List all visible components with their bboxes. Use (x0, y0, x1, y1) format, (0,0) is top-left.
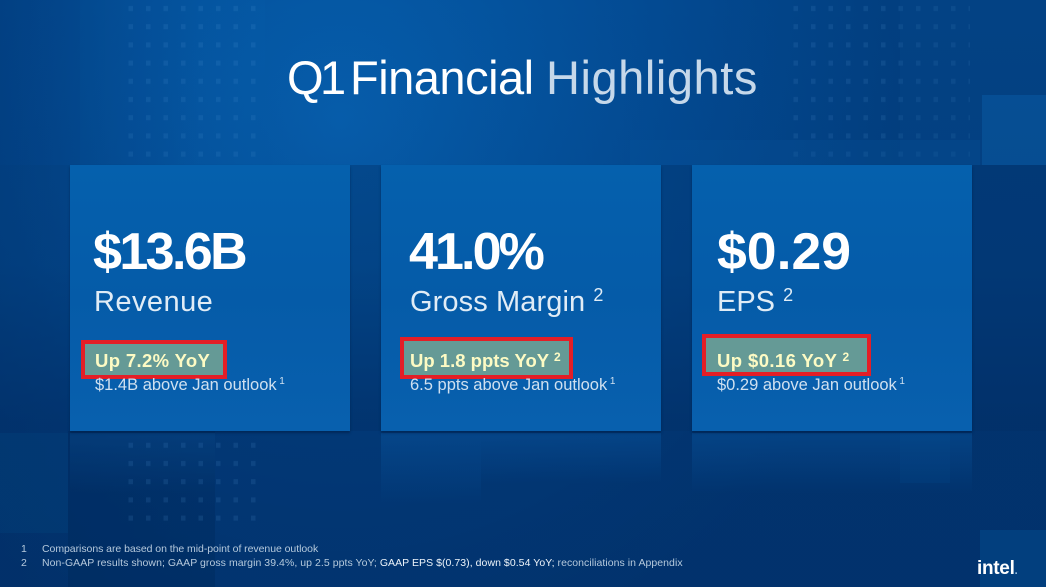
gross margin outlook note: 6.5 ppts above Jan outlook 1 (410, 376, 615, 394)
title: Highlights (546, 51, 758, 104)
eps outlook note: $0.29 above Jan outlook 1 (717, 376, 905, 394)
footnote 1: Comparisons are based on the mid-point of revenue outlook (42, 543, 318, 555)
footnote 1: 1 (21, 543, 27, 555)
revenue label: Revenue (94, 286, 213, 318)
footnote 2: Non-GAAP results shown; GAAP gross margin 39.4%, up 2.5 ppts YoY; GAAP EPS $(0.73), down $0.54 YoY; reconciliations in Appendix (42, 557, 683, 569)
footnote 2: 2 (21, 557, 27, 569)
logo: intel: intel. (977, 558, 1017, 579)
eps change text: Up $0.16 YoY 2 (717, 350, 850, 371)
title: Financial (350, 51, 534, 104)
revenue change highlight (81, 340, 227, 379)
eps value: $0.29 (717, 223, 851, 281)
title (287, 51, 758, 104)
gross margin label: Gross Margin 2 (410, 285, 604, 318)
eps change highlight (702, 334, 871, 376)
title: Q1 (287, 51, 343, 104)
revenue value: $13.6B (93, 223, 245, 281)
gross margin change text: Up 1.8 ppts YoY 2 (410, 350, 561, 371)
revenue change text: Up 7.2% YoY (95, 350, 210, 371)
panel: gross margin (381, 165, 661, 431)
gross margin value: 41.0% (409, 223, 542, 281)
revenue outlook note: $1.4B above Jan outlook 1 (95, 376, 285, 394)
panel: eps (692, 165, 972, 431)
panel: revenue (70, 165, 350, 431)
gross margin change highlight (400, 337, 573, 379)
eps label: EPS 2 (717, 285, 793, 318)
